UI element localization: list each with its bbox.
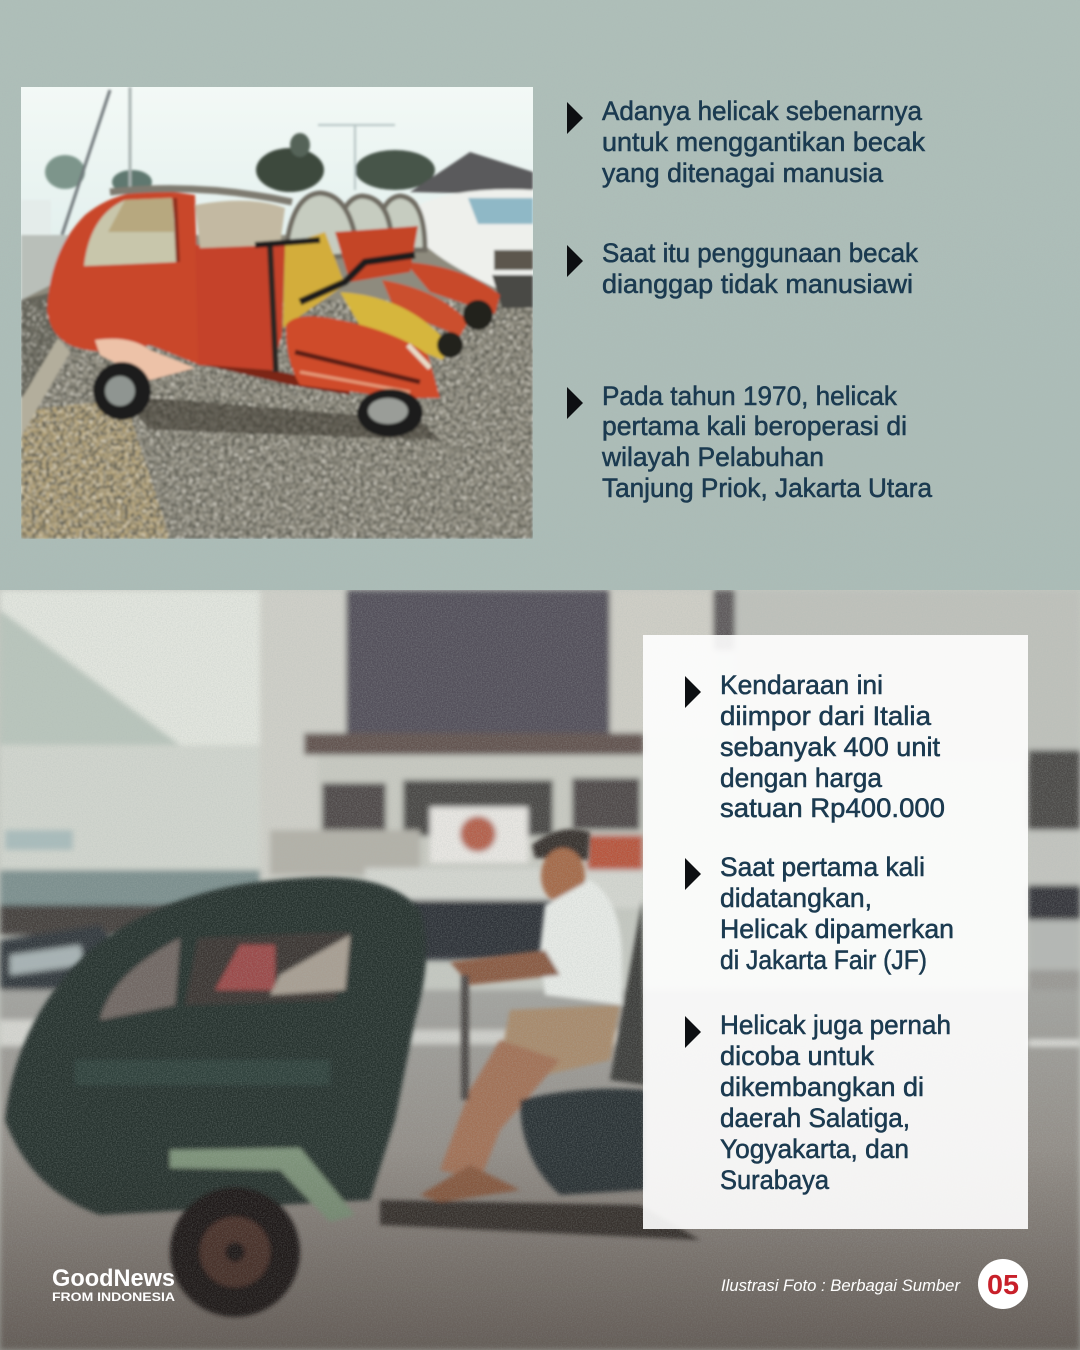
bullet item 1: Adanya helicak sebenarnya xyxy=(602,96,923,126)
bullet item 3: Pada tahun 1970, helicak xyxy=(602,381,897,411)
far vehicles xyxy=(283,193,500,360)
bullet item 4: satuan Rp400.000 xyxy=(720,793,945,823)
dark green helicak body xyxy=(5,877,700,1240)
logo: GoodNews from Indonesia: GoodNews xyxy=(52,1265,175,1292)
scooter body xyxy=(520,1089,645,1195)
bullet item 3: Tanjung Priok, Jakarta Utara xyxy=(602,473,933,503)
bullet item 1: untuk menggantikan becak xyxy=(602,127,925,157)
page number badge: 05 xyxy=(987,1269,1019,1300)
bullet list: top xyxy=(567,96,933,503)
wheel xyxy=(170,1187,300,1317)
bullet item 2: dianggap tidak manusiawi xyxy=(602,269,913,299)
roofs in a row xyxy=(285,193,425,260)
bullet item 4: dengan harga xyxy=(720,763,883,793)
main red vehicle xyxy=(47,189,440,398)
bullet item 4: sebanyak 400 unit xyxy=(720,732,940,762)
bullet item 6: Yogyakarta, dan xyxy=(720,1134,909,1164)
bullet item 5 xyxy=(685,852,954,975)
bullet item 2: Saat itu penggunaan becak xyxy=(602,238,918,268)
photo: driver riding dark green helicak on city street xyxy=(0,590,1080,1350)
panel: white list card xyxy=(643,635,1028,1229)
bullet item 4 xyxy=(685,670,945,823)
buildings xyxy=(0,590,1080,970)
bullet item 6: Surabaya xyxy=(720,1165,830,1195)
logo: GoodNews from Indonesia xyxy=(52,1265,175,1304)
footer shade xyxy=(0,1191,1080,1350)
bullet item 5: Saat pertama kali xyxy=(720,852,925,882)
bullet item 6: dicoba untuk xyxy=(720,1041,874,1071)
bullet item 5: Helicak dipamerkan xyxy=(720,914,954,944)
road xyxy=(0,970,1080,1350)
bullet item 6: Helicak juga pernah xyxy=(720,1010,951,1040)
street scene xyxy=(0,807,645,1012)
bullet item 4: Kendaraan ini xyxy=(720,670,883,700)
photo credit: Ilustrasi Foto : Berbagai Sumber xyxy=(721,1276,961,1295)
bullet item 6 xyxy=(685,1010,951,1195)
ground xyxy=(21,235,533,539)
bullet item 3: pertama kali beroperasi di xyxy=(602,411,907,441)
bullet item 6: dikembangkan di xyxy=(720,1072,924,1102)
photo: row of red and yellow helicak parked on gravel xyxy=(21,87,533,539)
bullet item 3: wilayah Pelabuhan xyxy=(601,442,824,472)
trees and buildings behind xyxy=(21,87,533,235)
bullet item 5: di Jakarta Fair (JF) xyxy=(720,945,927,975)
bullet item 1: yang ditenagai manusia xyxy=(602,158,884,188)
background xyxy=(0,0,1080,590)
scooter front shield xyxy=(286,316,440,398)
driver xyxy=(420,829,645,1202)
bullet item 4: diimpor dari Italia xyxy=(720,701,932,731)
page number badge xyxy=(978,1259,1028,1309)
bullet item 6: daerah Salatiga, xyxy=(720,1103,910,1133)
wheels xyxy=(93,362,423,437)
bullet item 3 xyxy=(567,381,933,503)
bullet item 1 xyxy=(567,96,925,188)
white car xyxy=(418,189,533,308)
bullet item 2 xyxy=(567,238,918,299)
bullet item 5: didatangkan, xyxy=(720,883,872,913)
logo: GoodNews from Indonesia: FROM INDONESIA xyxy=(52,1290,175,1304)
